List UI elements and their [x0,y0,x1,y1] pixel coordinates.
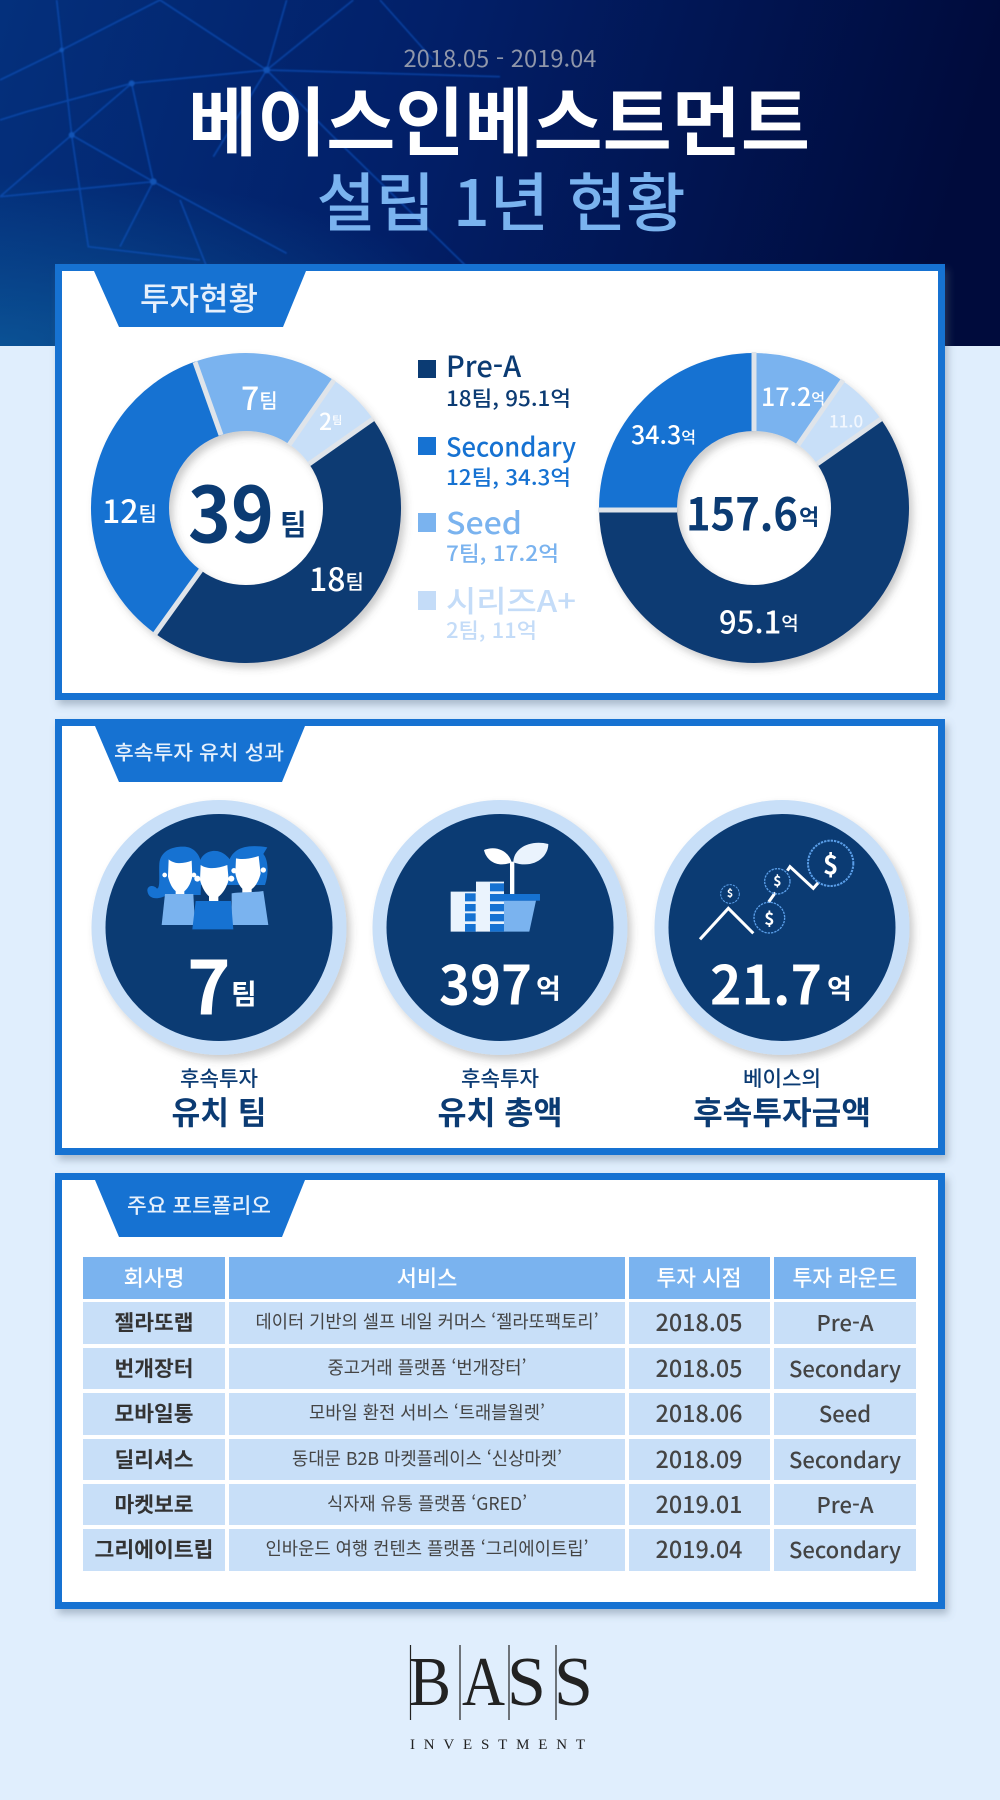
legend: Pre-A [418,344,571,413]
icon: three people [147,846,268,929]
donut chart: amounts: 억 [799,500,819,532]
legend: Seed: 7팀, 17.2억 [446,538,559,568]
stat: follow-on teams: 7 [187,930,231,1036]
table row 1: 2018.05 [656,1304,742,1338]
table row 2: Secondary [789,1352,901,1384]
logo: BASS Investment: S [554,1644,593,1721]
donut chart: teams: 18 [309,555,345,601]
table row 2 [83,1348,916,1389]
stat: BASS follow-on amount [654,800,910,1055]
table header: 회사명 [124,1261,184,1293]
panel: portfolio [58,1176,942,1606]
table row 6 [83,1529,916,1571]
table row 6: 그리에이트립 [94,1534,214,1564]
stat: follow-on total: 397 [439,942,532,1020]
stat: follow-on total [372,800,628,1055]
legend [418,344,576,645]
caption: follow-on total: 후속투자 [461,1063,539,1093]
caption: follow-on teams [172,1063,266,1134]
logo: BASS Investment: A [462,1644,505,1721]
caption: BASS follow-on amount [693,1063,871,1134]
donut chart: teams: 7 [241,374,259,420]
header background [0,0,1000,346]
legend: Pre-A: 18팀, 95.1억 [446,383,571,413]
subtitle: 설립 1년 현황 [316,153,686,245]
legend: Secondary: Secondary [446,428,576,464]
table row 1: 젤라또랩 [114,1307,194,1337]
table header: 투자 시점 [656,1261,742,1293]
date range: 2018.05 - 2019.04 [404,40,597,74]
caption: BASS follow-on amount: 후속투자금액 [693,1088,871,1134]
icon: rising dollar chart: $ [773,871,781,891]
legend: Pre-A: Pre-A [446,344,522,386]
panel: follow-on investment [58,722,942,1152]
donut chart: amounts: 억 [781,608,799,636]
table row 1 [83,1302,916,1344]
caption: follow-on teams: 유치 팀 [172,1088,266,1134]
table header: 투자 라운드 [792,1261,898,1293]
donut chart: amounts: 157.6 [686,478,798,544]
donut chart: teams: 12 [102,487,138,533]
icon: rising dollar chart [700,841,853,939]
table row 4: 동대문 B2B 마켓플레이스 ‘신상마켓’ [292,1445,562,1471]
table row 3: 2018.06 [656,1395,742,1429]
donut chart: amounts: 34.3 [631,416,681,452]
donut chart: amounts: 11.0 [829,408,863,432]
table row 2: 2018.05 [656,1350,742,1384]
icon: rising dollar chart: $ [823,845,838,882]
icon: rising dollar chart: $ [727,886,733,901]
tab: portfolio [95,1180,305,1237]
donut chart: teams: 팀 [345,566,364,594]
table row 5: 2019.01 [656,1486,742,1520]
table row 5: 마켓보로 [114,1489,194,1519]
logo: BASS Investment: B [409,1644,451,1721]
icon: rising dollar chart: $ [764,905,774,930]
legend: Seed: Seed [446,499,522,543]
table row 4 [83,1439,916,1480]
table row 4: 2018.09 [656,1441,742,1475]
table row 2: 번개장터 [114,1353,194,1383]
table header: 서비스 [397,1261,457,1293]
legend: Series A+: 시리즈A+ [446,577,576,621]
caption: follow-on total [438,1063,562,1134]
table row 2: 중고거래 플랫폼 ‘번개장터’ [328,1354,526,1380]
logo: BASS Investment [409,1644,593,1753]
tab: investment status [94,271,306,327]
donut chart: amounts [592,346,916,670]
legend: Seed [418,499,559,568]
tab: follow-on results [95,726,305,782]
table row 6: 2019.04 [656,1531,742,1565]
logo: BASS Investment: S [507,1644,546,1721]
logo: BASS Investment: INVESTMENT [410,1737,585,1753]
table row 3: 모바일 환전 서비스 ‘트래블월렛’ [309,1399,545,1425]
stat: follow-on teams [92,800,346,1055]
stat: BASS follow-on amount: 21.7 [710,942,822,1020]
icon: coins and sprout [451,843,548,932]
stat: BASS follow-on amount: 억 [827,968,852,1006]
donut chart: teams: 팀 [259,384,278,414]
table row 3: 모바일통 [114,1398,194,1428]
table row 5 [83,1484,916,1525]
table row 4: Secondary [789,1443,901,1475]
tab: portfolio: 주요 포트폴리오 [127,1190,271,1220]
caption: follow-on total: 유치 총액 [438,1088,562,1134]
stat: follow-on total: 억 [536,968,561,1006]
legend: Secondary: 12팀, 34.3억 [446,462,571,492]
legend: Series A+ [418,577,576,645]
donut chart: teams: 팀 [280,502,307,544]
table row 5: Pre-A [816,1488,874,1520]
panel: investment status [58,268,942,696]
donut chart: teams: 2팀 [319,403,342,437]
table row 6: 인바운드 여행 컨텐츠 플랫폼 ‘그리에이트립’ [266,1535,588,1561]
table row 6: Secondary [789,1533,901,1565]
donut chart: amounts: 억 [811,388,825,408]
donut chart: teams [84,346,408,670]
tab: follow-on results: 후속투자 유치 성과 [114,736,284,766]
tab: investment status: 투자현황 [140,274,258,320]
table row 5: 식자재 유통 플랫폼 ‘GRED’ [327,1490,527,1516]
donut chart: amounts: 17.2 [761,378,811,414]
table row 1: 데이터 기반의 셀프 네일 커머스 ‘젤라또팩토리’ [256,1308,598,1334]
title: 베이스인베스트먼트 [188,62,810,172]
legend: Series A+: 2팀, 11억 [446,615,537,645]
caption: BASS follow-on amount: 베이스의 [743,1063,821,1093]
donut chart: teams: 팀 [138,498,157,526]
stat: follow-on teams: 팀 [231,973,257,1013]
donut chart: amounts: 억 [681,424,696,448]
caption: follow-on teams: 후속투자 [180,1063,258,1093]
legend: Secondary [418,428,576,492]
portfolio table [83,1257,916,1571]
table header [83,1257,916,1299]
donut chart: amounts: 95.1 [719,598,781,642]
table row 4: 딜리셔스 [114,1444,194,1474]
donut chart: teams: 39 [188,454,274,566]
table row 3: Seed [819,1397,871,1429]
table row 3 [83,1393,916,1435]
table row 1: Pre-A [816,1306,874,1338]
